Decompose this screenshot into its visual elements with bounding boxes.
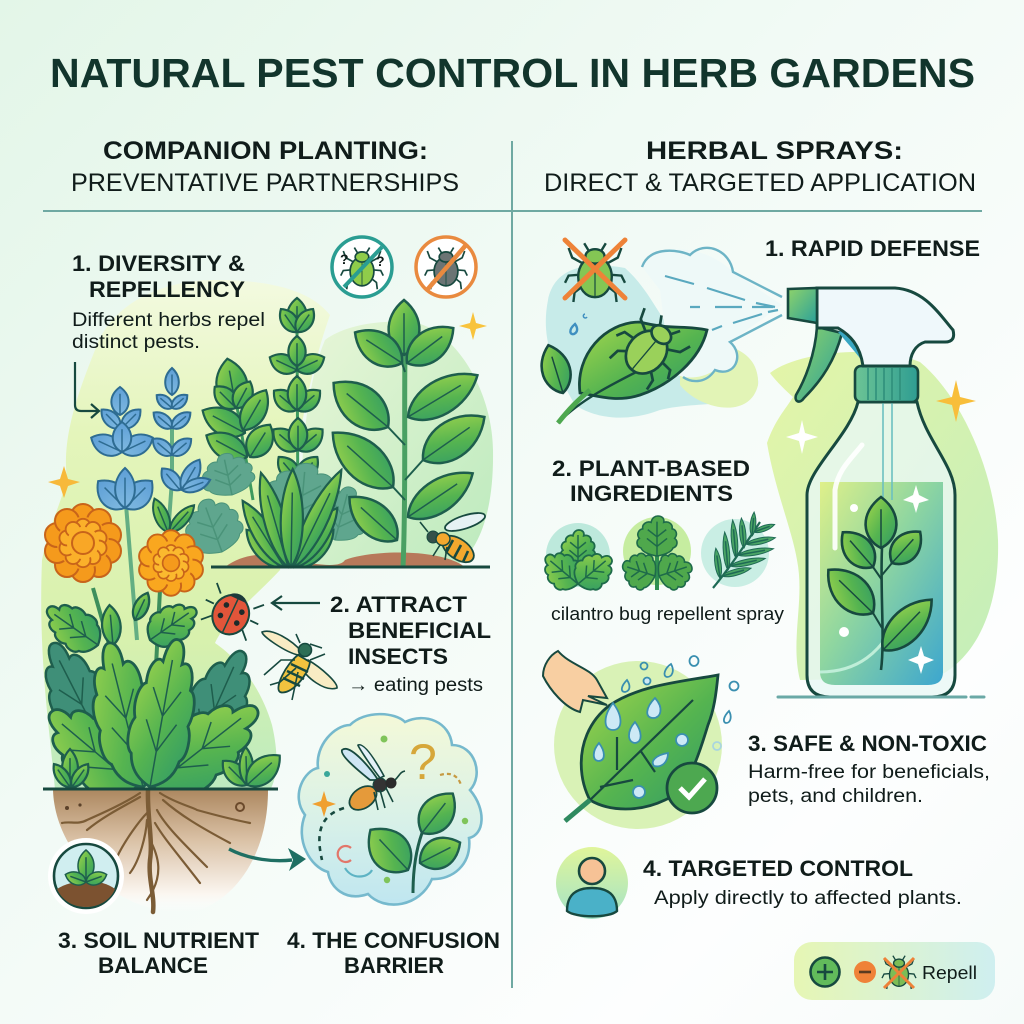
icon: no aphid: ? [376,253,385,269]
text: safe and non-toxic: Harm-free for beneficials, [748,762,990,783]
plant: basil [320,300,495,567]
sparkles in bottle [903,485,929,513]
sparkle white [786,420,818,454]
text: the confusion barrier: BARRIER [344,953,444,978]
text: attract beneficial insects [330,592,491,696]
icon: person [556,847,628,919]
seedlings at ground [49,746,288,794]
drops [570,314,587,334]
plant: back leaves [25,631,268,777]
icon: mint [535,523,621,597]
bottle body [807,402,955,697]
companion planting heading [71,137,459,197]
arrow: to lavender [75,362,99,418]
ground line [211,566,490,568]
sprayer head [817,288,954,366]
sparkle [459,312,487,340]
plant: marigold stems and leaves [36,588,206,780]
text: diversity and repellency: distinct pests. [72,332,200,353]
plant: thyme [266,298,329,520]
teal blob [546,266,758,418]
bug on leaf [602,301,697,396]
panel: herbal sprays [535,137,998,1000]
companion planting heading: COMPANION PLANTING: [103,137,428,165]
icon: no beetle [416,237,476,297]
text: attract beneficial insects: BENEFICIAL [348,618,491,643]
minus icon [854,961,876,983]
lavender base leaves [148,496,199,536]
icon: soil nutrient [48,838,124,914]
liquid [820,482,943,685]
small leaf [535,341,576,397]
water drops [594,656,738,798]
text: attract beneficial insects: → eating pests [348,675,483,696]
illustration: safe leaf [543,651,738,829]
panel: companion planting [25,137,500,978]
text: safe and non-toxic: pets, and children. [748,786,923,807]
text: attract beneficial insects: INSECTS [348,644,448,669]
background blobs [41,280,493,790]
spray illustration [535,240,782,423]
spray bottle [767,288,998,697]
sparkle gold [936,380,976,422]
text: soil nutrient balance [58,928,260,978]
sparkle left [48,466,80,498]
check badge [667,763,717,813]
nozzle [788,288,817,323]
hand [543,651,607,712]
text: diversity and repellency [72,251,265,353]
spray dashes [665,276,778,330]
plus icon [810,958,840,986]
herbal sprays heading [544,137,976,197]
circle background [554,661,722,829]
plant: large front leaves [29,634,276,813]
roots [62,790,250,912]
big leaf [579,322,707,398]
plant in bottle [817,497,943,670]
plant: cilantro background [176,448,375,562]
plant: grass blades [234,465,351,573]
mist cloud [642,249,782,378]
trigger [796,327,842,402]
shelf line [778,696,984,698]
icon: rosemary [701,512,776,588]
flower: marigold small [139,530,203,596]
text: plant-based ingredients: 2. PLANT-BASED [552,456,750,481]
text: safe and non-toxic [748,731,990,807]
dip tube [883,402,892,500]
text: targeted control [643,856,962,909]
text: diversity and repellency: 1. DIVERSITY & [72,251,245,276]
confusion barrier cloud [299,714,482,905]
herbal sprays heading: DIRECT & TARGETED APPLICATION [544,169,976,197]
dots [324,736,468,883]
plant: lavender [87,368,212,640]
bottle highlights [835,445,862,548]
question mark: ? [409,734,437,790]
crossed bug icon [882,956,916,989]
text: plant-based ingredients: INGREDIENTS [570,481,733,506]
arrow: to ladybug [272,596,320,610]
herbal sprays heading: HERBAL SPRAYS: [646,137,903,165]
legend [794,942,995,1000]
icon: no aphid [332,237,392,297]
icon: cilantro [617,516,697,593]
soil [53,790,268,912]
text: attract beneficial insects: 2. ATTRACT [330,592,468,617]
confused bee [342,745,405,815]
soil ground [225,553,465,567]
text: cilantro spray: cilantro bug repellent spray [551,604,784,624]
flower: marigold large [45,504,121,582]
text: the confusion barrier [287,928,500,978]
title: NATURAL PEST CONTROL IN HERB GARDENS [50,50,975,96]
leaf stem [558,360,660,423]
companion planting heading: PREVENTATIVE PARTNERSHIPS [71,169,459,197]
crossed bug [565,240,625,302]
arrow: soil to confusion [229,848,306,871]
bottle blob [767,352,998,680]
dashed flight path [319,808,344,860]
insect: ladybug [196,582,267,645]
text: diversity and repellency: REPELLENCY [89,277,245,302]
text: targeted control: Apply directly to affected plants. [654,888,962,909]
seedling [357,784,467,893]
text: targeted control: 4. TARGETED CONTROL [643,856,913,881]
text: diversity and repellency: Different herbs repel [72,310,265,331]
text: the confusion barrier: 4. THE CONFUSION [287,928,500,953]
text: plant-based ingredients [552,456,750,506]
text: soil nutrient balance: 3. SOIL NUTRIENT [58,928,260,953]
collar [855,366,918,402]
insect: hoverfly [262,631,337,700]
text: soil nutrient balance: BALANCE [98,953,208,978]
insect: bee on ground [420,509,487,568]
text: rapid defense: 1. RAPID DEFENSE [765,236,980,261]
plant: oregano [197,356,281,500]
text: safe and non-toxic: 3. SAFE & NON-TOXIC [748,731,987,756]
legend label: Repell [922,963,977,983]
confusion marks [338,774,461,876]
ground line lower [43,788,278,790]
icon: no aphid: ? [340,251,349,267]
leaf [581,675,718,809]
sparkle orange [312,791,336,817]
